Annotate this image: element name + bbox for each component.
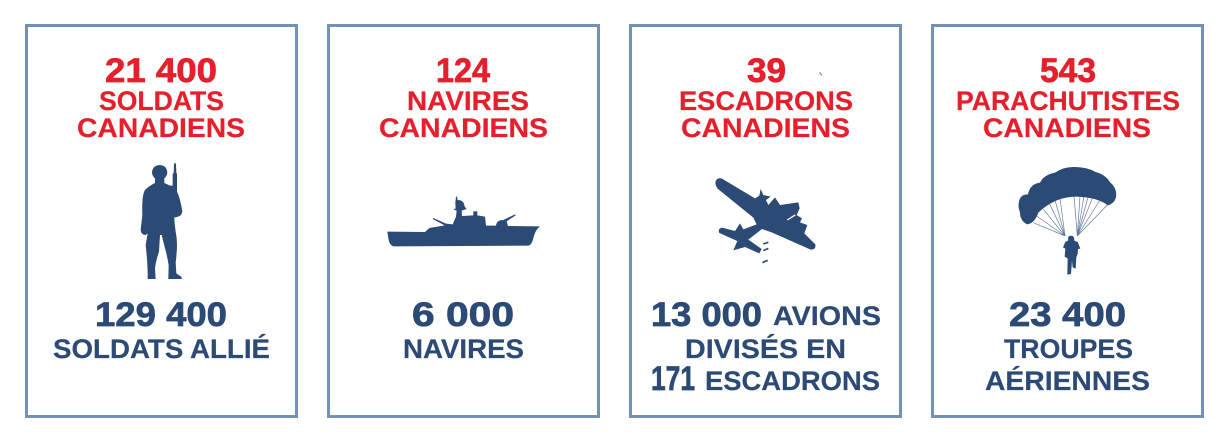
- stat: 129 400 allied soldiers: SOLDATS ALLIÉ: [53, 333, 270, 364]
- stat: 129 400 allied soldiers: 129 400: [95, 296, 227, 334]
- heading: 543 Canadian paratroopers: CANADIENS: [983, 113, 1151, 143]
- stat: 129 400 allied soldiers: [53, 296, 270, 364]
- icon: soldier: [141, 163, 182, 279]
- heading: 21 400 Canadian soldiers: SOLDATS: [99, 86, 224, 116]
- stat: 23 400 airborne troops: [985, 296, 1150, 396]
- icon: bomber plane: [715, 178, 815, 263]
- stat: 6 000 ships: [403, 296, 524, 364]
- panel: paratroopers: [932, 26, 1202, 416]
- heading: 543 Canadian paratroopers: 543: [1040, 52, 1096, 90]
- stat: 13 000 planes in 171 squadrons: ESCADRONS: [705, 366, 880, 396]
- heading: 39 Canadian squadrons: 39: [747, 52, 786, 90]
- panel: squadrons: [630, 26, 900, 416]
- heading: 21 400 Canadian soldiers: 21 400: [105, 52, 217, 90]
- heading: 124 Canadian ships: CANADIENS: [379, 113, 548, 143]
- heading: 39 Canadian squadrons: [679, 52, 853, 143]
- stat: 23 400 airborne troops: 23 400: [1009, 296, 1126, 334]
- stat: 23 400 airborne troops: AÉRIENNES: [985, 365, 1150, 396]
- stat: 23 400 airborne troops: TROUPES: [1004, 334, 1133, 364]
- heading: 39 Canadian squadrons: ESCADRONS: [679, 86, 853, 116]
- icon: warship: [387, 197, 540, 246]
- stat: 6 000 ships: NAVIRES: [403, 334, 524, 364]
- heading: 21 400 Canadian soldiers: CANADIENS: [77, 113, 245, 143]
- stat: 13 000 planes in 171 squadrons: 13 000: [651, 296, 762, 334]
- heading: 124 Canadian ships: NAVIRES: [407, 86, 529, 116]
- heading: 543 Canadian paratroopers: PARACHUTISTES: [956, 86, 1180, 116]
- stat: 13 000 planes in 171 squadrons: [651, 296, 881, 398]
- stat: 13 000 planes in 171 squadrons: 171: [651, 360, 695, 398]
- heading: 124 Canadian ships: 124: [436, 52, 490, 90]
- heading: 543 Canadian paratroopers: [956, 52, 1180, 143]
- heading: 124 Canadian ships: [379, 52, 548, 143]
- stat: 6 000 ships: 6 000: [412, 296, 514, 334]
- heading: 21 400 Canadian soldiers: [77, 52, 245, 143]
- stat: 13 000 planes in 171 squadrons: DIVISÉS EN: [685, 333, 846, 364]
- heading: 39 Canadian squadrons: CANADIENS: [681, 113, 850, 143]
- panel: soldiers: [26, 26, 296, 416]
- panel: ships: [328, 26, 598, 416]
- stat: 13 000 planes in 171 squadrons: AVIONS: [773, 301, 881, 331]
- icon: parachutist: [1019, 167, 1116, 275]
